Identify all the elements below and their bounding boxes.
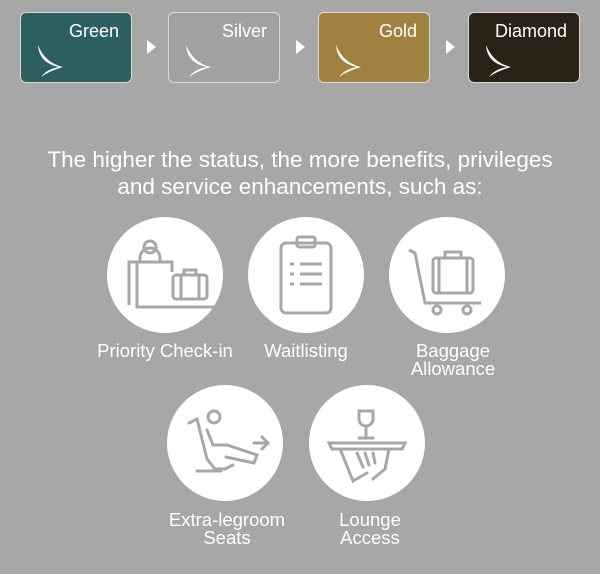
label: Extra-legroom Seats: Extra-legroom	[169, 509, 285, 530]
tier: Diamond	[468, 12, 580, 83]
tier: Diamond: Diamond	[495, 21, 567, 41]
label: Waitlisting: Waitlisting	[264, 340, 348, 361]
icon: priority check-in	[107, 217, 223, 333]
heading: The higher the status, the more benefits, privileges	[47, 147, 553, 172]
tier: Green	[20, 12, 132, 83]
icon: waitlisting	[248, 217, 364, 333]
tier: Green: Green	[69, 21, 119, 41]
arrow	[296, 40, 305, 54]
label: Priority Check-in: Priority Check-in	[97, 340, 233, 361]
arrow	[446, 40, 455, 54]
label: Baggage Allowance: Baggage	[416, 340, 490, 361]
label: Extra-legroom Seats: Seats	[203, 527, 251, 548]
heading	[47, 147, 553, 199]
tier: Silver: Silver	[222, 21, 267, 41]
label: Baggage Allowance	[411, 340, 495, 379]
tier: Silver	[168, 12, 280, 83]
heading: and service enhancements, such as:	[117, 174, 483, 199]
label: Extra-legroom Seats	[169, 509, 285, 548]
label: Lounge Access: Lounge	[339, 509, 401, 530]
icon: lounge access	[309, 385, 425, 501]
tier: Gold: Gold	[379, 21, 417, 41]
tier: Gold	[318, 12, 430, 83]
label: Lounge Access	[339, 509, 401, 548]
icon: extra-legroom seats	[167, 385, 283, 501]
label: Baggage Allowance: Allowance	[411, 358, 495, 379]
arrow	[147, 40, 156, 54]
icon: baggage	[389, 217, 505, 333]
label: Lounge Access: Access	[340, 527, 400, 548]
